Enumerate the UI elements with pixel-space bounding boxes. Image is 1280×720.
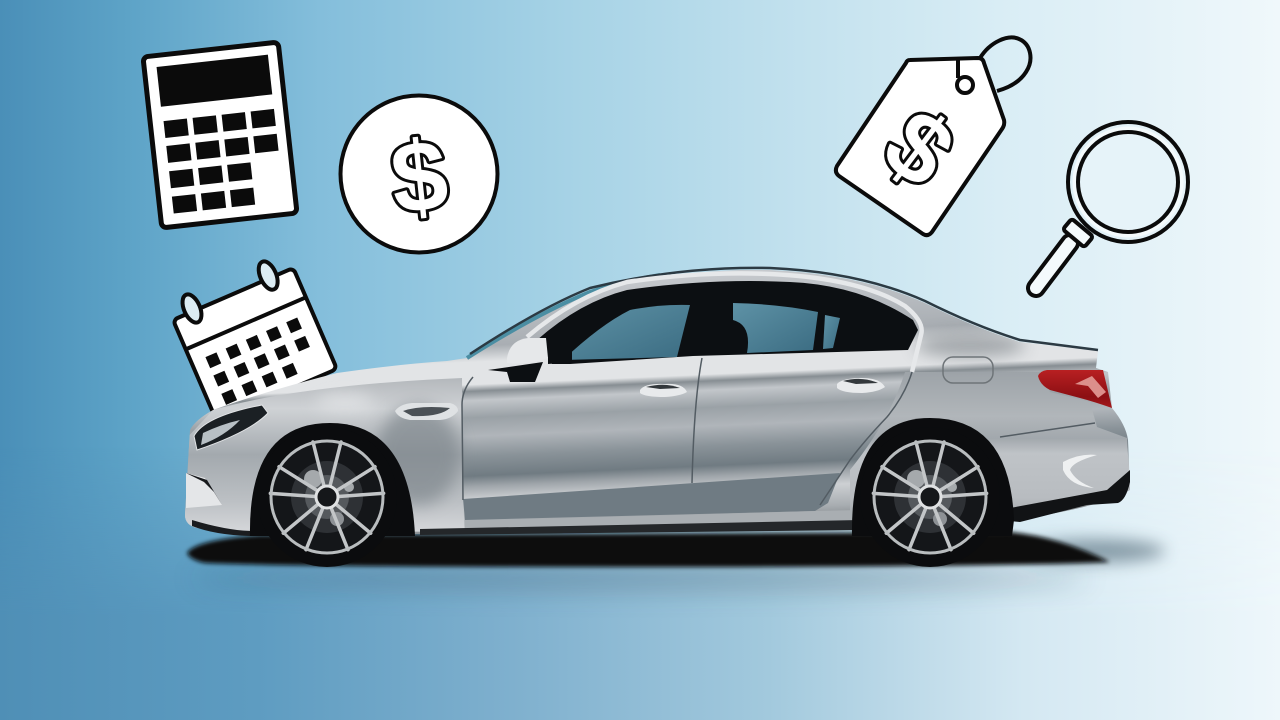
car [185, 268, 1130, 567]
car body [185, 270, 1130, 534]
icon: dollar coin: $ [386, 118, 453, 236]
icon: calendar [166, 251, 337, 421]
car roof outline and windshield [467, 268, 1098, 358]
calendar day squares [205, 317, 318, 405]
car fuel door [943, 357, 993, 383]
icon: price tag: $ [865, 87, 974, 208]
car door seams [462, 358, 1095, 505]
car front fender [185, 378, 465, 532]
car door handles [640, 378, 885, 397]
ground shadow [187, 532, 1165, 588]
car headlight [194, 405, 268, 450]
car rear quarter panel [850, 372, 1130, 520]
car rear bumper [1010, 455, 1130, 522]
car door sill [463, 473, 840, 520]
car fender shading [315, 333, 1025, 505]
calculator display [157, 55, 272, 107]
car tail light [1038, 370, 1112, 408]
icon: dollar coin [340, 96, 498, 252]
icon: price tag [836, 38, 1030, 235]
rear wheel [860, 427, 1000, 567]
car roof chrome strip [527, 273, 922, 372]
rear wheel arch [852, 418, 1014, 536]
icon: calculator [143, 42, 297, 228]
car side windows [537, 281, 918, 364]
icon: magnifying glass [1036, 122, 1188, 288]
front wheel [257, 427, 397, 567]
car front bumper intake [186, 473, 250, 536]
car fender vent [395, 403, 458, 420]
car side mirror [488, 338, 572, 382]
calendar rings [179, 259, 281, 325]
calculator keys [164, 109, 284, 214]
front wheel arch [250, 423, 415, 536]
